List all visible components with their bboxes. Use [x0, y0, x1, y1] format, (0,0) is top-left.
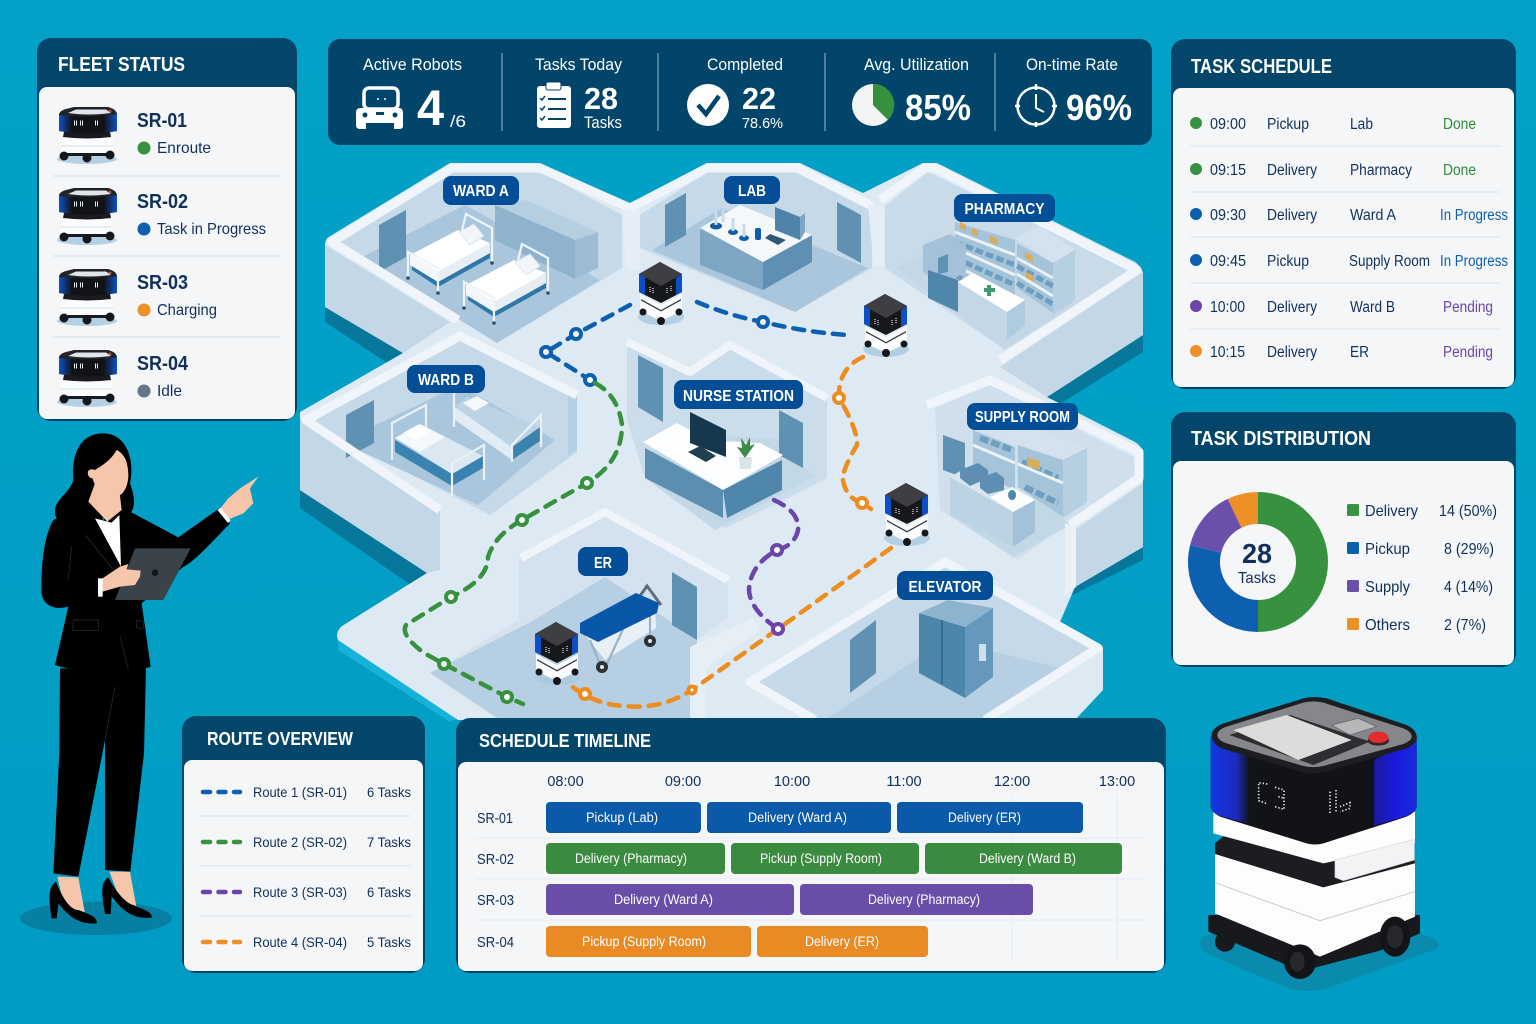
- plant: [737, 437, 755, 469]
- door: Ward A: [379, 210, 406, 272]
- floor plan map: [300, 163, 1143, 722]
- KPI: completed: 78.6%: [742, 115, 783, 132]
- panel: schedule timeline: [456, 718, 1166, 973]
- robot row SR-01: Enroute: [157, 140, 211, 157]
- shirt: [95, 515, 121, 567]
- row SR-04: SR-04: [477, 935, 514, 951]
- wall end: [568, 393, 577, 456]
- shelves right: [1015, 226, 1075, 315]
- route row 3: Route 3 (SR-03): [253, 884, 347, 900]
- room: Lab: [630, 168, 884, 312]
- row 10:00: [1190, 299, 1493, 316]
- robot row SR-01: SR-01: [137, 110, 187, 132]
- panel: task distribution: [1171, 412, 1516, 667]
- row SR-01: Pickup (Lab): [586, 810, 658, 825]
- row 09:15: Done: [1443, 162, 1476, 179]
- cabinet: [495, 200, 598, 279]
- panel: fleet status: [37, 38, 297, 421]
- KPI: tasks today: [535, 55, 622, 132]
- elevator box: [919, 600, 993, 698]
- robot row SR-03: SR-03: [137, 272, 188, 294]
- robot row SR-02: SR-02: [137, 191, 188, 213]
- row 09:00: Lab: [1350, 116, 1373, 133]
- legs: [53, 668, 146, 877]
- jacket: [41, 503, 230, 672]
- wall top: Supply Room: [927, 380, 1139, 525]
- door: Ward B: [346, 400, 374, 458]
- map robot 2: [863, 294, 909, 357]
- row 09:45: 09:45: [1210, 253, 1246, 270]
- route row 4: [203, 934, 411, 950]
- KPI: completed: 22: [742, 81, 776, 116]
- route 3 purple: [749, 500, 798, 629]
- robot shadow: [1200, 923, 1439, 991]
- donut chart: [1204, 508, 1312, 616]
- row SR-03: Delivery (Pharmacy): [868, 892, 980, 907]
- row SR-04: [477, 926, 928, 957]
- KPI: on-time rate: [1015, 55, 1132, 128]
- row SR-01: SR-01: [477, 811, 513, 827]
- wall top: Lab: [630, 168, 872, 208]
- shelves left: [955, 222, 1015, 320]
- label: Ward B: [407, 365, 485, 393]
- row 09:15: Delivery: [1267, 162, 1317, 179]
- robot row SR-01: [57, 107, 211, 164]
- label: ER: ER: [594, 555, 612, 572]
- node on route 3 and 4: [773, 624, 783, 634]
- legend: Others: [1365, 617, 1410, 634]
- heading: fleet status: FLEET STATUS: [58, 54, 185, 76]
- door: Elevator room: [850, 620, 876, 693]
- route row 2: Route 2 (SR-02): [253, 834, 347, 850]
- route 4 orange: [570, 357, 891, 707]
- wall faces: [300, 245, 1143, 587]
- row 09:15: [1190, 162, 1476, 179]
- row 10:00: Pending: [1443, 299, 1493, 316]
- legend: Pickup: [1365, 541, 1410, 558]
- tray: [1229, 715, 1370, 765]
- room: Ward A: [332, 168, 640, 343]
- route 1 blue: [541, 302, 847, 385]
- head top: [1212, 697, 1417, 773]
- legend: [1347, 503, 1497, 634]
- room: Pharmacy: [880, 168, 1137, 360]
- label: Pharmacy: [954, 194, 1055, 222]
- wall top: ER: [521, 512, 728, 580]
- KPI: utilization: [852, 55, 971, 128]
- shelves: [973, 415, 1087, 518]
- robot row SR-04: Idle: [157, 383, 182, 400]
- row 09:30: Ward A: [1350, 207, 1397, 224]
- row SR-02: Pickup (Supply Room): [760, 851, 882, 866]
- label: Elevator: ELEVATOR: [908, 579, 982, 596]
- KPI: tasks today: 28: [584, 81, 618, 116]
- map robot 1: [638, 262, 684, 325]
- partition: [690, 618, 760, 720]
- legend: 8 (29%): [1444, 541, 1494, 558]
- KPI: completed: [687, 55, 783, 132]
- icon: clock: [1015, 84, 1057, 127]
- time axis: 13:00: [1099, 774, 1135, 790]
- lab counter: [700, 205, 812, 290]
- wall top: Pharmacy: [880, 168, 1137, 360]
- route row 4: Route 4 (SR-04): [253, 934, 347, 950]
- label: ER: [578, 547, 628, 576]
- KPI: tasks today: Tasks Today: [535, 55, 622, 74]
- panel: KPI bar: [328, 39, 1152, 145]
- route row 3: 6 Tasks: [367, 884, 411, 900]
- row 09:30: In Progress: [1440, 207, 1508, 224]
- room: Nurse Station: [627, 340, 827, 530]
- neck and face: [88, 450, 128, 522]
- room: Supply Room: [927, 380, 1139, 595]
- hair: [55, 433, 134, 521]
- room: Elevator: [750, 562, 1098, 720]
- label: Pharmacy: PHARMACY: [964, 201, 1045, 218]
- legend: 4 (14%): [1444, 579, 1493, 596]
- doors: Nurse Station: [638, 355, 803, 468]
- KPI: active robots: /6: [450, 112, 466, 131]
- donut chart: Tasks: [1238, 570, 1276, 587]
- robot row SR-02: Task in Progress: [157, 221, 266, 238]
- KPI: on-time rate: On-time Rate: [1026, 55, 1118, 74]
- row SR-02: SR-02: [477, 852, 514, 868]
- row SR-02: [477, 843, 1122, 874]
- heading: route overview: ROUTE OVERVIEW: [207, 729, 353, 749]
- robot row SR-03: Charging: [157, 302, 217, 319]
- row SR-02: Delivery (Ward B): [979, 851, 1076, 866]
- robot row SR-04: [57, 350, 189, 407]
- legend: Delivery: [1365, 503, 1418, 520]
- row 09:00: Done: [1443, 116, 1476, 133]
- KPI: completed: Completed: [707, 55, 783, 74]
- label: Ward A: [443, 176, 519, 205]
- KPI: active robots: 4: [417, 80, 444, 136]
- wall top: Elevator: [750, 562, 1098, 720]
- pharmacy machine: [923, 234, 966, 312]
- KPI: active robots: Active Robots: [363, 55, 462, 74]
- row SR-01: [477, 802, 1083, 833]
- route 2 green: [405, 383, 622, 704]
- mid black tray: [1215, 835, 1415, 887]
- row 09:00: [1190, 116, 1476, 133]
- row 10:00: Ward B: [1350, 299, 1395, 316]
- row SR-01: Delivery (Ward A): [748, 810, 847, 825]
- row 10:15: 10:15: [1210, 344, 1245, 361]
- room labels: [407, 176, 1078, 600]
- base: [1208, 915, 1420, 971]
- pointing hand: [219, 477, 258, 522]
- nurse desk: [643, 412, 783, 518]
- row SR-03: SR-03: [477, 893, 514, 909]
- time axis: 12:00: [994, 774, 1030, 790]
- time axis: [547, 774, 1135, 790]
- time axis: 08:00: [547, 774, 584, 790]
- heading: task schedule: TASK SCHEDULE: [1191, 56, 1332, 78]
- wall top: Ward B: [306, 336, 577, 510]
- row SR-02: Delivery (Pharmacy): [575, 851, 687, 866]
- heading: task distribution: TASK DISTRIBUTION: [1191, 428, 1371, 450]
- KPI: active robots: [356, 55, 466, 136]
- bed 4: [454, 393, 541, 462]
- robot row SR-03: [57, 269, 217, 326]
- row 10:15: ER: [1350, 344, 1369, 361]
- ankles: [57, 872, 137, 913]
- label: Ward A: WARD A: [453, 183, 509, 200]
- wall top: Nurse Station: [627, 342, 827, 398]
- bed 3: [392, 405, 484, 496]
- donut chart: 28: [1242, 538, 1272, 569]
- time axis: 10:00: [774, 774, 810, 790]
- map robot 3: [884, 483, 930, 546]
- KPI: utilization: 85%: [905, 87, 971, 128]
- robot row SR-04: SR-04: [137, 353, 189, 375]
- woman presenter: [20, 433, 258, 935]
- door: ER: [672, 572, 697, 640]
- panel: task schedule: [1171, 39, 1516, 389]
- label: Lab: LAB: [738, 183, 766, 200]
- shoes: [50, 877, 152, 923]
- head band: [1211, 737, 1417, 844]
- route row 1: 6 Tasks: [367, 784, 411, 800]
- row SR-04: Pickup (Supply Room): [582, 934, 706, 949]
- robot row SR-02: [57, 188, 266, 245]
- row 10:15: [1190, 344, 1493, 361]
- row 09:45: [1190, 253, 1508, 270]
- tablet: [115, 548, 191, 600]
- supply counter: [950, 463, 1035, 547]
- bed 1: [406, 214, 494, 295]
- route row 2: 7 Tasks: [367, 834, 411, 850]
- row 10:15: Pending: [1443, 344, 1493, 361]
- hand on tablet: [100, 564, 141, 592]
- KPI: utilization: Avg. Utilization: [864, 55, 969, 74]
- wall top: Ward A: [332, 168, 630, 320]
- row 09:45: Supply Room: [1349, 253, 1430, 270]
- row 10:00: Delivery: [1267, 299, 1317, 316]
- row 09:30: Delivery: [1267, 207, 1317, 224]
- dot display: [1259, 783, 1350, 813]
- bed 2: [462, 244, 550, 325]
- floor base: [300, 163, 1143, 720]
- row 09:15: Pharmacy: [1350, 162, 1412, 179]
- time axis: 11:00: [886, 774, 922, 790]
- row SR-04: Delivery (ER): [805, 934, 879, 949]
- row 09:45: In Progress: [1440, 253, 1508, 270]
- row 09:00: 09:00: [1210, 116, 1246, 133]
- label: Supply Room: [967, 403, 1078, 430]
- label: Elevator: [897, 571, 993, 600]
- row 09:30: 09:30: [1210, 207, 1246, 224]
- row 10:15: Delivery: [1267, 344, 1317, 361]
- icon: clipboard: [537, 82, 571, 128]
- time axis: 09:00: [665, 774, 701, 790]
- route row 2: [203, 834, 411, 850]
- route row 1: [203, 784, 411, 800]
- row 09:00: Pickup: [1267, 116, 1309, 133]
- KPI: on-time rate: 96%: [1066, 87, 1132, 128]
- doors: Lab: [665, 193, 861, 263]
- icon: check: [687, 84, 729, 126]
- icon: pie: [852, 84, 894, 126]
- label: Supply Room: SUPPLY ROOM: [975, 409, 1070, 426]
- route row 3: [203, 884, 411, 900]
- legend: Supply: [1365, 579, 1410, 596]
- map robot 4: [534, 622, 580, 685]
- legend: 2 (7%): [1444, 617, 1486, 634]
- drawer: [1335, 839, 1414, 881]
- row 09:45: Pickup: [1267, 253, 1309, 270]
- route row 1: Route 1 (SR-01): [253, 784, 347, 800]
- stretcher: [580, 586, 661, 673]
- label: Nurse Station: NURSE STATION: [683, 388, 794, 405]
- upper white: [1213, 812, 1415, 863]
- KPI: tasks today: Tasks: [584, 113, 622, 132]
- row SR-01: Delivery (ER): [948, 810, 1021, 825]
- door: Supply: [943, 435, 965, 478]
- lower body: [1215, 853, 1415, 957]
- row 10:00: 10:00: [1210, 299, 1245, 316]
- icon: robot: [356, 88, 403, 129]
- pharmacy counter: [958, 273, 1025, 340]
- row SR-03: [477, 884, 1033, 915]
- legend: 14 (50%): [1439, 503, 1497, 520]
- red button: [1368, 732, 1389, 746]
- room: Ward B: [306, 336, 577, 515]
- label: Ward B: WARD B: [418, 372, 474, 389]
- row 09:15: 09:15: [1210, 162, 1246, 179]
- panel: route overview: [182, 716, 425, 973]
- heading: schedule timeline: SCHEDULE TIMELINE: [479, 731, 651, 751]
- row 09:30: [1190, 207, 1508, 224]
- control panel: [1332, 718, 1377, 735]
- large robot illustration: [1200, 697, 1439, 991]
- route row 4: 5 Tasks: [367, 934, 411, 950]
- row SR-03: Delivery (Ward A): [614, 892, 713, 907]
- wheels: [1284, 917, 1410, 979]
- outer shadows: [300, 300, 1143, 722]
- label: Nurse Station: [674, 380, 803, 409]
- label: Lab: [724, 176, 780, 204]
- room: ER: [430, 512, 760, 720]
